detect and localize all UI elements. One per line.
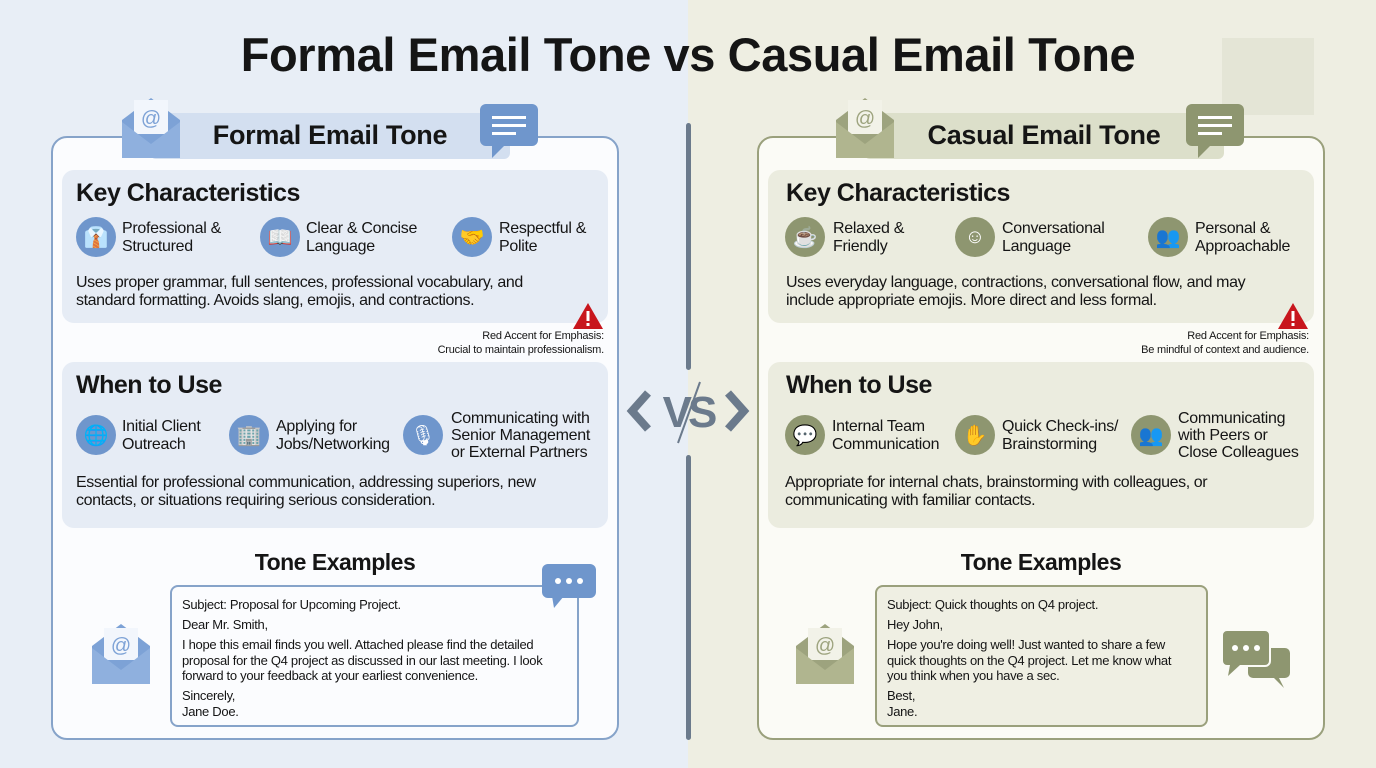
icon: formal envelope: @ [111,635,131,657]
section: casual key characteristics: ☺ [965,226,985,248]
section: casual when to use [768,362,1314,528]
example: casual email: Hope you're doing well! Just wanted to share a few [887,637,1165,652]
section: formal key characteristics: Clear & Concise [306,220,417,237]
section: formal when to use: 🏢 [237,424,261,446]
section: casual key characteristics: Conversational [1002,220,1105,237]
section: casual when to use: Communicating [1178,410,1285,427]
section: formal when to use: 🌐 [84,424,108,446]
header: casual [836,98,1244,159]
section: casual when to use: When to Use [786,371,932,399]
example: casual email: Jane. [887,704,917,718]
section: formal when to use: When to Use [76,371,222,399]
heading: casual tone examples: Tone Examples [961,549,1121,575]
section: formal when to use: Outreach [122,436,185,453]
vs badge [626,382,750,444]
title: Formal Email Tone vs Casual Email Tone [241,28,1135,81]
callout: casual red accent [1141,303,1309,356]
section: casual key characteristics [768,170,1314,323]
section: casual when to use: Internal Team [832,418,925,435]
section: casual key characteristics: include appropriate emojis. More direct and less formal. [786,292,1157,309]
icon: casual envelope: @ [815,635,835,657]
example: casual email: quick thoughts on the Q4 project. Let me know what [887,652,1171,668]
section: casual key characteristics: Friendly [833,238,888,255]
panel: casual [757,136,1325,740]
section: formal key characteristics: 🤝 [460,226,484,248]
icon: envelope: @ [855,108,875,130]
example: formal email: forward to your feedback at your earliest convenience. [182,668,478,683]
section: formal key characteristics [62,170,608,323]
callout: casual red accent: Be mindful of context and audience. [1141,344,1309,356]
divider with vs [626,123,750,740]
example: formal email: Sincerely, [182,688,235,703]
section: formal key characteristics: Structured [122,238,193,255]
section: formal key characteristics: Polite [499,238,537,255]
section: casual when to use: 👥 [1139,424,1163,446]
example: formal email [170,585,579,727]
section: casual key characteristics: 👥 [1156,226,1180,248]
callout: casual red accent: Red Accent for Emphasis: [1187,330,1309,342]
icon: envelope [122,98,180,158]
icon: formal chat bubble [542,564,596,608]
example: casual email: Best, [887,688,915,703]
section: formal when to use: or External Partners [451,444,587,461]
example: casual email [875,585,1208,727]
section: formal key characteristics: Language [306,238,375,255]
section: formal key characteristics: 👔 [84,226,108,248]
section: formal when to use: 🎙 [410,424,436,446]
section: casual when to use: Appropriate for internal chats, brainstorming with colleagues, or [785,474,1207,491]
section: casual when to use: Brainstorming [1002,436,1097,453]
example: formal email: Jane Doe. [182,704,239,718]
section: casual key characteristics: Personal & [1195,220,1270,237]
icon: envelope [836,98,894,158]
section: formal when to use: Applying for [276,418,357,435]
icon: casual envelope [796,624,854,684]
header: casual: Casual Email Tone [928,120,1160,150]
panel: formal [51,136,619,740]
section: formal key characteristics: Uses proper grammar, full sentences, professional vocabulary, and [76,274,523,291]
section: casual when to use: Close Colleagues [1178,444,1299,461]
header: formal: Formal Email Tone [213,120,447,150]
section: formal when to use: Jobs/Networking [276,436,390,453]
section: casual key characteristics: Uses everyday language, contractions, conversational flow, and may [786,274,1245,291]
section: formal when to use: Senior Management [451,427,590,444]
section: casual when to use: 💬 [793,424,817,446]
icon: speech bubble [1186,104,1244,158]
example: formal email: Dear Mr. Smith, [182,617,268,632]
example: formal email: Subject: Proposal for Upcoming Project. [182,597,401,612]
section: casual key characteristics: Relaxed & [833,220,904,237]
icon: envelope: @ [141,108,161,130]
section: formal when to use: Communicating with [451,410,590,427]
section: formal when to use: Essential for professional communication, addressing superiors, new [76,474,536,491]
vs badge: VS [663,388,716,437]
section: formal key characteristics: Professional & [122,220,221,237]
section: casual when to use: Communication [832,436,939,453]
section: casual key characteristics: Key Characteristics [786,179,1010,207]
section: casual key characteristics: Approachable [1195,238,1290,255]
section: formal when to use: Initial Client [122,418,201,435]
section: formal when to use: contacts, or situations requiring serious consideration. [76,492,435,509]
callout: formal red accent: Crucial to maintain professionalism. [438,344,604,356]
section: casual when to use: ✋ [963,424,987,446]
section: casual when to use: Quick Check-ins/ [1002,418,1118,435]
section: formal when to use [62,362,608,528]
section: casual key characteristics: Language [1002,238,1071,255]
section: casual when to use: with Peers or [1178,427,1267,444]
callout: formal red accent: Red Accent for Emphasis: [482,330,604,342]
example: formal email: proposal for the Q4 project as discussed in our last meeting. I look [182,652,542,668]
heading: formal tone examples: Tone Examples [255,549,415,575]
icon: casual chat bubbles [1223,631,1290,688]
section: casual key characteristics: ☕ [793,226,817,248]
section: formal key characteristics: 📖 [268,226,292,248]
example: formal email: I hope this email finds you well. Attached please find the detailed [182,637,533,652]
icon: formal envelope [92,624,150,684]
section: formal key characteristics: Key Characteristics [76,179,300,207]
icon: speech bubble [480,104,538,158]
section: formal key characteristics: standard formatting. Avoids slang, emojis, and contractions. [76,292,474,309]
example: casual email: Subject: Quick thoughts on Q4 project. [887,597,1098,612]
section: casual when to use: communicating with familiar contacts. [785,492,1035,509]
section: formal key characteristics: Respectful & [499,220,586,237]
header: formal [122,98,538,159]
example: casual email: you think when you have a sec. [887,668,1059,683]
example: casual email: Hey John, [887,617,943,632]
callout: formal red accent [438,303,604,356]
